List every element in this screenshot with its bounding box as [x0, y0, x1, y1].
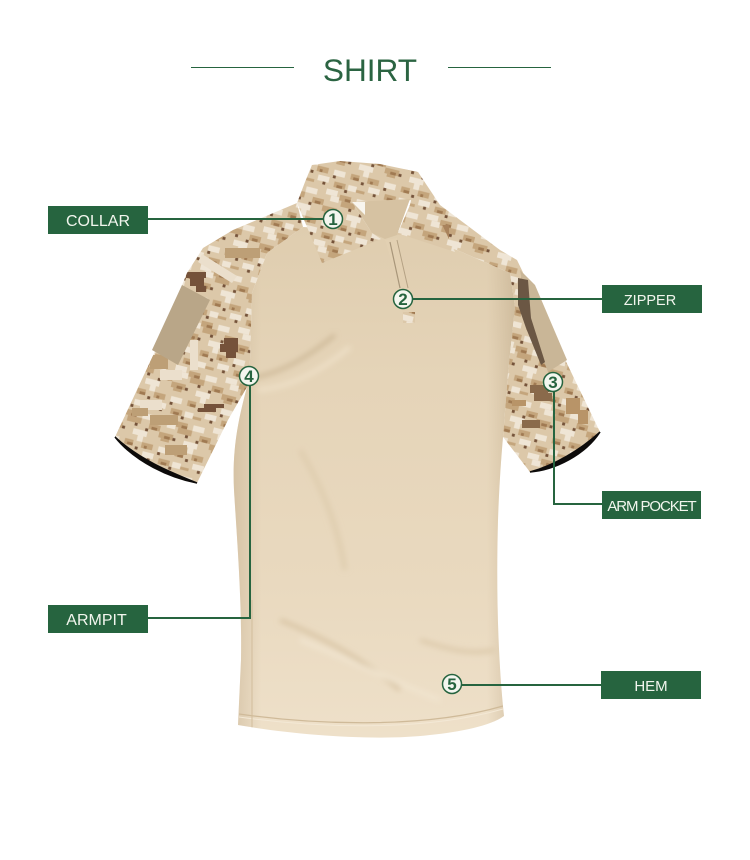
back collar — [305, 161, 418, 204]
marker 4: 4 — [244, 367, 254, 386]
left sleeve and shoulder camouflage — [110, 200, 310, 490]
left sleeve brown clusters — [186, 272, 238, 412]
marker 3 — [544, 372, 562, 392]
right sleeve pocket shadow — [518, 278, 545, 365]
label: arm pocket — [602, 491, 701, 519]
callout 3: arm pocket — [554, 391, 701, 519]
marker 3: 3 — [548, 373, 558, 392]
label: collar — [48, 206, 148, 234]
marker 1 — [324, 210, 342, 229]
marker 5 — [442, 674, 462, 694]
label: armpit — [48, 605, 148, 633]
title: SHIRT — [323, 52, 417, 88]
label: arm pocket: ARM POCKET — [607, 498, 697, 515]
left sleeve tan clusters — [132, 248, 260, 455]
right sleeve tan clusters — [512, 398, 588, 424]
left sleeve black cuff — [115, 437, 197, 483]
left sleeve velcro patch — [152, 285, 210, 365]
label: collar: COLLAR — [66, 213, 130, 230]
right shoulder brown mark — [442, 225, 449, 239]
shirt illustration — [110, 161, 605, 739]
label: zipper: ZIPPER — [624, 293, 676, 309]
left sleeve light flaps — [140, 254, 237, 410]
placket and zipper — [385, 238, 415, 323]
marker 2 — [394, 290, 412, 309]
marker 1: 1 — [328, 210, 338, 229]
callout 4: armpit — [48, 385, 250, 633]
body shading and wrinkles — [234, 269, 515, 728]
neck label patch — [352, 202, 365, 215]
label: hem: HEM — [634, 678, 668, 695]
neck opening — [352, 199, 410, 239]
right sleeve pocket flap — [520, 270, 567, 372]
label: hem — [601, 671, 701, 699]
right sleeve brown clusters — [522, 385, 552, 428]
shirt body — [234, 227, 515, 738]
callout 2: zipper — [412, 285, 702, 313]
label: zipper — [602, 285, 702, 313]
right sleeve and shoulder camouflage — [400, 170, 605, 475]
callout 1: collar — [48, 206, 324, 234]
label: armpit: ARMPIT — [66, 612, 127, 629]
right sleeve black cuff — [530, 432, 600, 472]
callout 5: hem — [461, 671, 701, 699]
marker 2: 2 — [398, 290, 408, 309]
right front collar — [397, 172, 455, 252]
marker 5: 5 — [447, 675, 457, 694]
left front collar — [297, 165, 381, 263]
marker 4 — [240, 366, 258, 386]
